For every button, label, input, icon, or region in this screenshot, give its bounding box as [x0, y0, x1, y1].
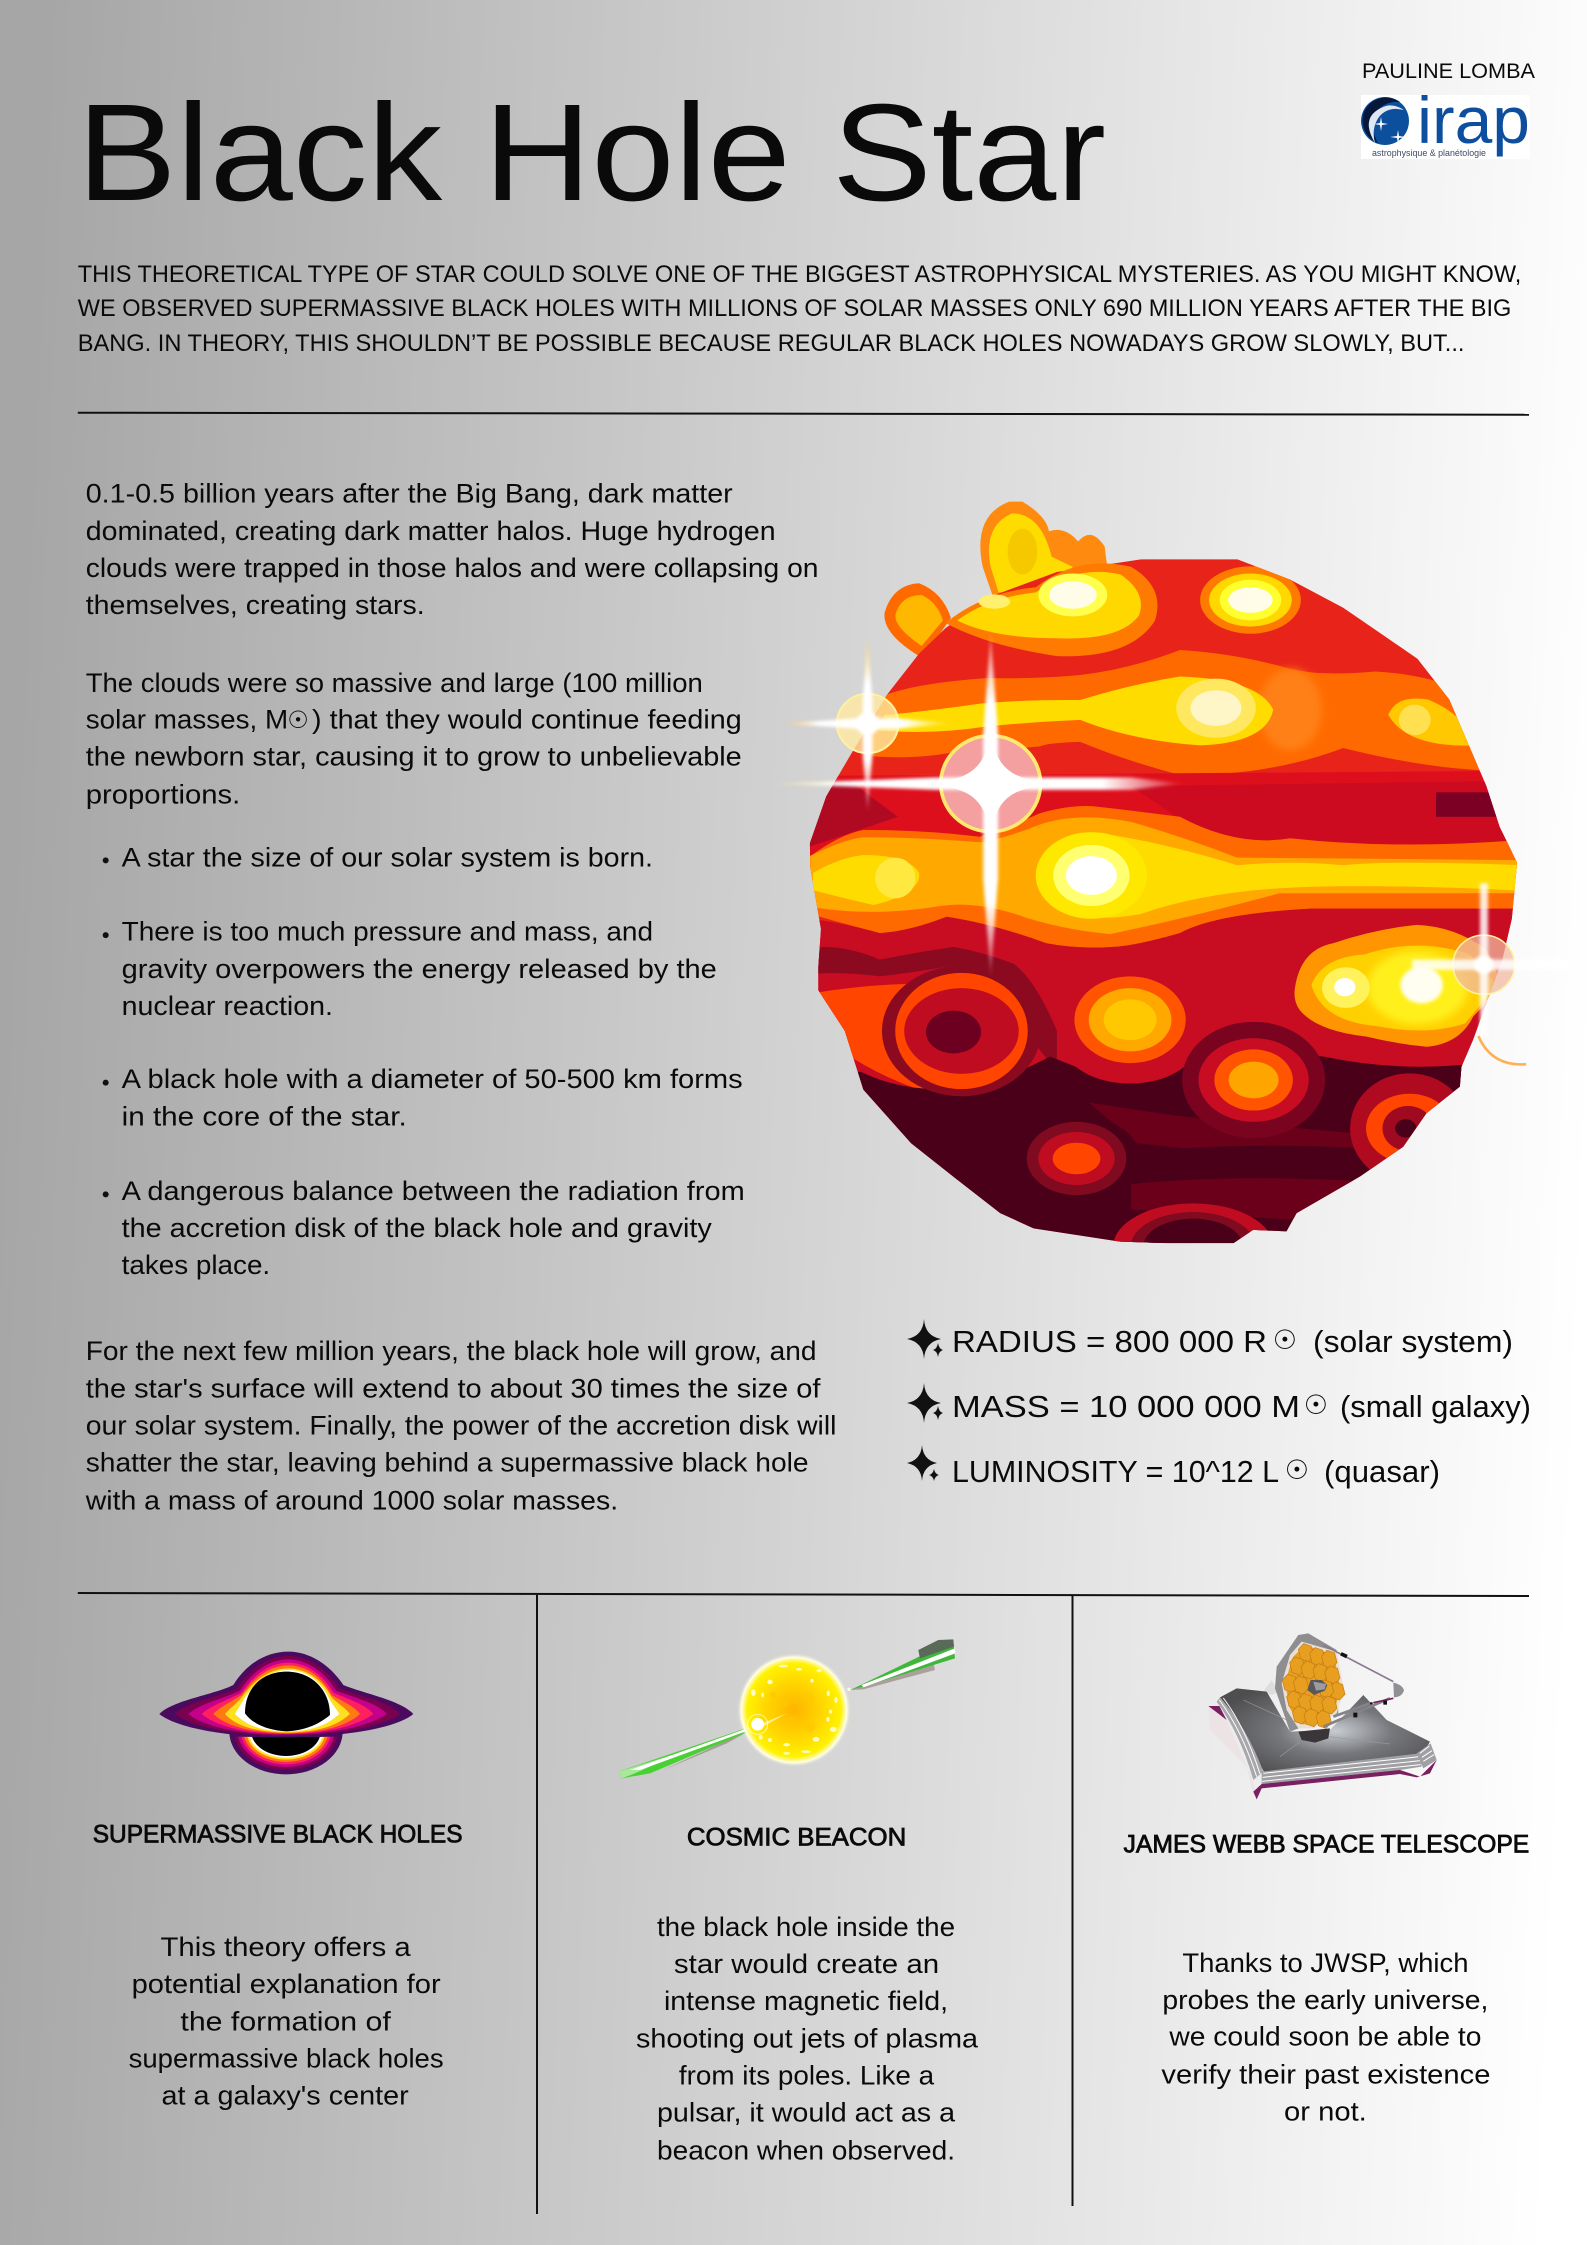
stats list: RADIUS = 800 000 R	[952, 1324, 1267, 1359]
text block: formation: clouds were trapped in those halos and were collapsing on	[86, 553, 818, 583]
intro text: THIS THEORETICAL TYPE OF STAR COULD SOLVE ONE OF THE BIGGEST ASTROPHYSICAL MYSTERIES. AS YOU MIGHT KNOW,	[78, 261, 1521, 288]
bullet list: A star the size of our solar system is born.	[122, 842, 653, 872]
text block: outcome: For the next few million years, the black hole will grow, and	[86, 1336, 816, 1366]
stats list: ☉	[1273, 1325, 1297, 1356]
text block: at a galaxy's center	[162, 2081, 409, 2111]
stats list	[907, 1319, 1531, 1489]
bullet list: nuclear reaction.	[122, 991, 333, 1021]
icon: sparkle luminosity	[907, 1445, 939, 1481]
heading: JAMES WEBB SPACE TELESCOPE	[1124, 1830, 1529, 1858]
author name: PAULINE LOMBA	[1362, 60, 1535, 83]
bullet list: takes place.	[122, 1250, 270, 1280]
stats list: LUMINOSITY = 10^12 L	[952, 1454, 1279, 1489]
stats list: ☉	[1285, 1455, 1309, 1486]
bullet list: There is too much pressure and mass, and	[122, 917, 653, 947]
icon: sparkle radius	[907, 1319, 943, 1359]
text block: the formation of	[180, 2006, 391, 2036]
text block: verify their past existence	[1161, 2060, 1490, 2090]
text block	[636, 1912, 978, 2165]
text block: This theory offers a	[161, 1932, 411, 1962]
icon: star with jets	[618, 1639, 955, 1778]
text block: outcome: the star's surface will extend to about 30 times the size of	[86, 1374, 821, 1404]
text block	[129, 1932, 444, 2111]
sparkle: small flare left	[785, 639, 953, 813]
panel: supermassive black holes	[93, 1652, 463, 2111]
text block: we could soon be able to	[1168, 2022, 1481, 2052]
text block: formation: 0.1-0.5 billion years after the Big Bang, dark matter	[86, 478, 733, 508]
text block: clouds: ) that they would continue feeding	[312, 705, 742, 735]
text block: clouds: proportions.	[86, 780, 240, 810]
title: Black Hole Star	[77, 76, 1106, 230]
text block: formation: themselves, creating stars.	[86, 590, 425, 620]
text block: or not.	[1284, 2096, 1367, 2126]
bullet list: A black hole with a diameter of 50-500 km forms	[122, 1064, 743, 1094]
logo: irap: astrophysique & planétologie	[1372, 148, 1486, 158]
heading: COSMIC BEACON	[687, 1823, 906, 1851]
text block: clouds: solar masses, M	[86, 705, 288, 735]
text block: outcome: our solar system. Finally, the power of the accretion disk will	[86, 1411, 836, 1441]
stats list: (solar system)	[1313, 1324, 1513, 1359]
text block: clouds	[86, 668, 742, 810]
icon: sparkle mass	[907, 1383, 943, 1423]
intro text	[78, 261, 1521, 357]
text block	[1161, 1948, 1490, 2126]
text block: pulsar, it would act as a	[657, 2097, 955, 2127]
text block: formation	[86, 478, 818, 620]
stats list: ☉	[1304, 1390, 1328, 1421]
text block: outcome	[85, 1336, 836, 1515]
text block: the black hole inside the	[657, 1912, 955, 1942]
bullet list: the accretion disk of the black hole and gravity	[122, 1213, 712, 1243]
text block: probes the early universe,	[1162, 1985, 1488, 2015]
bullet list: gravity overpowers the energy released by the	[122, 954, 717, 984]
text block: star would create an	[674, 1949, 939, 1979]
stats list: MASS = 10 000 000 M	[952, 1389, 1300, 1424]
icon: telescope	[1208, 1633, 1437, 1799]
sparkle: large flare	[776, 633, 1184, 977]
intro text: BANG. IN THEORY, THIS SHOULDN’T BE POSSIBLE BECAUSE REGULAR BLACK HOLES NOWADAYS GROW SLOWLY, BUT...	[78, 330, 1465, 357]
text block: clouds: the newborn star, causing it to grow to unbelievable	[86, 742, 742, 772]
panel: cosmic beacon	[618, 1639, 978, 2165]
intro text: WE OBSERVED SUPERMASSIVE BLACK HOLES WITH MILLIONS OF SOLAR MASSES ONLY 690 MILLION YEARS AFTER THE BIG	[78, 295, 1511, 322]
sparkle: small flare right	[1412, 883, 1569, 1064]
text block: potential explanation for	[132, 1969, 441, 1999]
panel: james webb space telescope	[1124, 1633, 1529, 2126]
text block: outcome: with a mass of around 1000 solar masses.	[85, 1485, 618, 1515]
icon: black hole	[159, 1652, 413, 1774]
illustration: black hole star	[788, 502, 1526, 1244]
text block: clouds: ☉	[287, 706, 309, 734]
bullet list	[103, 842, 745, 1280]
text block: shooting out jets of plasma	[636, 2024, 978, 2054]
stats list: (quasar)	[1324, 1454, 1440, 1489]
text block: outcome: shatter the star, leaving behind a supermassive black hole	[86, 1447, 809, 1477]
text block: formation: dominated, creating dark matter halos. Huge hydrogen	[86, 516, 776, 546]
logo: irap	[1361, 83, 1530, 159]
text block: supermassive black holes	[129, 2044, 444, 2074]
bullet list: A dangerous balance between the radiation from	[122, 1176, 745, 1206]
logo: irap: irap	[1417, 83, 1530, 157]
text block: Thanks to JWSP, which	[1182, 1948, 1468, 1978]
stats list: (small galaxy)	[1340, 1389, 1531, 1424]
text block: intense magnetic field,	[664, 1986, 948, 2016]
heading: SUPERMASSIVE BLACK HOLES	[93, 1820, 463, 1848]
bullet list: in the core of the star.	[122, 1102, 407, 1132]
text block: beacon when observed.	[657, 2135, 955, 2165]
text block: from its poles. Like a	[679, 2061, 934, 2091]
text block: clouds: The clouds were so massive and large (100 million	[86, 668, 703, 698]
